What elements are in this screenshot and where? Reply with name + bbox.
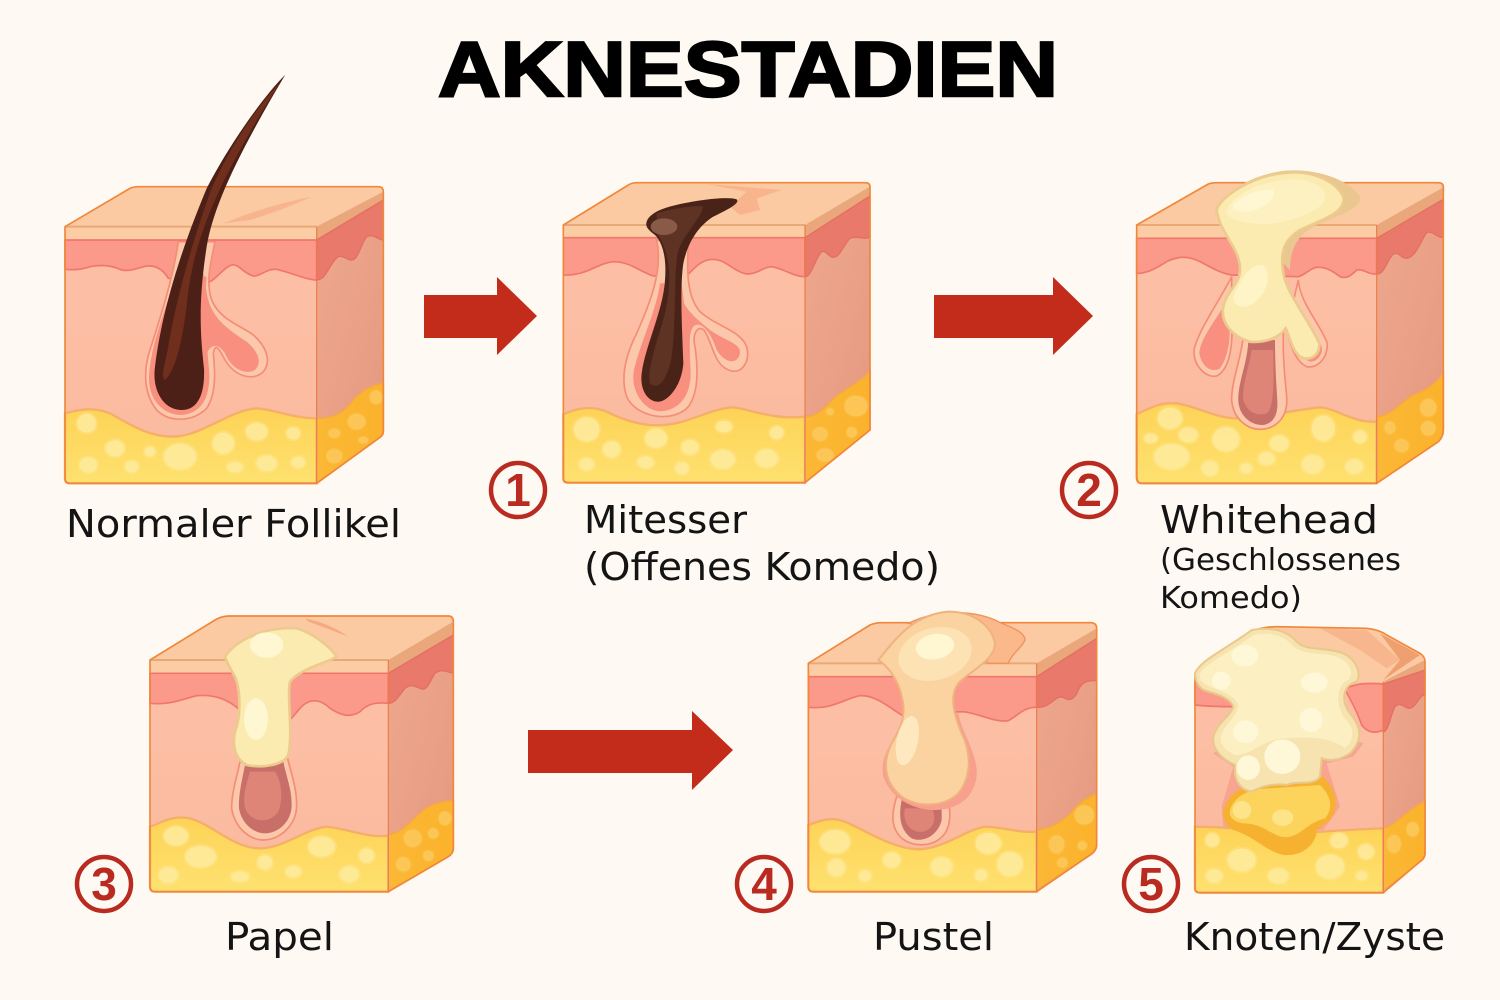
step marker 1: 1 [505,464,531,516]
label: Pustel: Pustel [873,915,994,959]
follicle and sebaceous gland [146,242,267,419]
cream mass [1195,629,1359,792]
label: Whitehead: Komedo) [1160,581,1302,616]
step marker 3: 3 [91,858,117,910]
title: AKNESTADIEN [438,25,1058,113]
arrow 2 [934,277,1093,355]
step marker 4 [737,857,791,911]
label: Whitehead: Whitehead [1160,498,1378,542]
open comedo plug [641,198,737,402]
step marker 5 [1124,857,1178,911]
skin block: nodule / cyst [1195,627,1425,893]
label: Whitehead: (Geschlossenes [1160,543,1401,578]
follicle and sebaceous gland [624,240,748,417]
hair [154,75,285,410]
step marker 2 [1062,463,1116,517]
skin block: pustule [808,612,1097,892]
pore [893,797,950,845]
whitehead plug [1215,170,1360,270]
step marker 3 [77,857,131,911]
step marker 2: 2 [1076,464,1102,516]
fat cells [159,827,374,883]
inflammation halo [1213,710,1363,830]
label: Normaler Follikel: Normaler Follikel [66,502,401,546]
fat cells [1144,408,1367,476]
skin block: normal follicle [65,75,383,483]
pustule plug [908,613,1025,663]
pore [232,755,297,840]
label: Mitesser: (Offenes Komedo) [584,545,940,589]
inflammation halo [883,713,977,810]
fat cells [820,830,1023,881]
step marker 5: 5 [1138,858,1164,910]
arrow 3 [528,711,733,790]
label: Whitehead [1160,498,1401,616]
step marker 4: 4 [751,858,777,910]
yellow cyst core [1223,777,1336,855]
label: Knoten/Zyste: Knoten/Zyste [1184,915,1445,959]
skin block: papule [150,616,453,892]
left sebaceous gland [1194,277,1232,376]
label: Mitesser [584,498,940,589]
right sebaceous gland [1287,280,1327,367]
fat cells [574,417,783,474]
papule plug [225,628,337,766]
step marker 1 [491,463,545,517]
fat cells [77,414,305,473]
comedo pore [1232,333,1287,429]
arrow 1 [424,277,537,355]
skin block: blackhead [563,183,870,483]
fat cells [1206,833,1374,883]
label: Mitesser: Mitesser [584,498,747,542]
skin block: whitehead [1137,170,1443,483]
label: Papel: Papel [225,915,334,959]
